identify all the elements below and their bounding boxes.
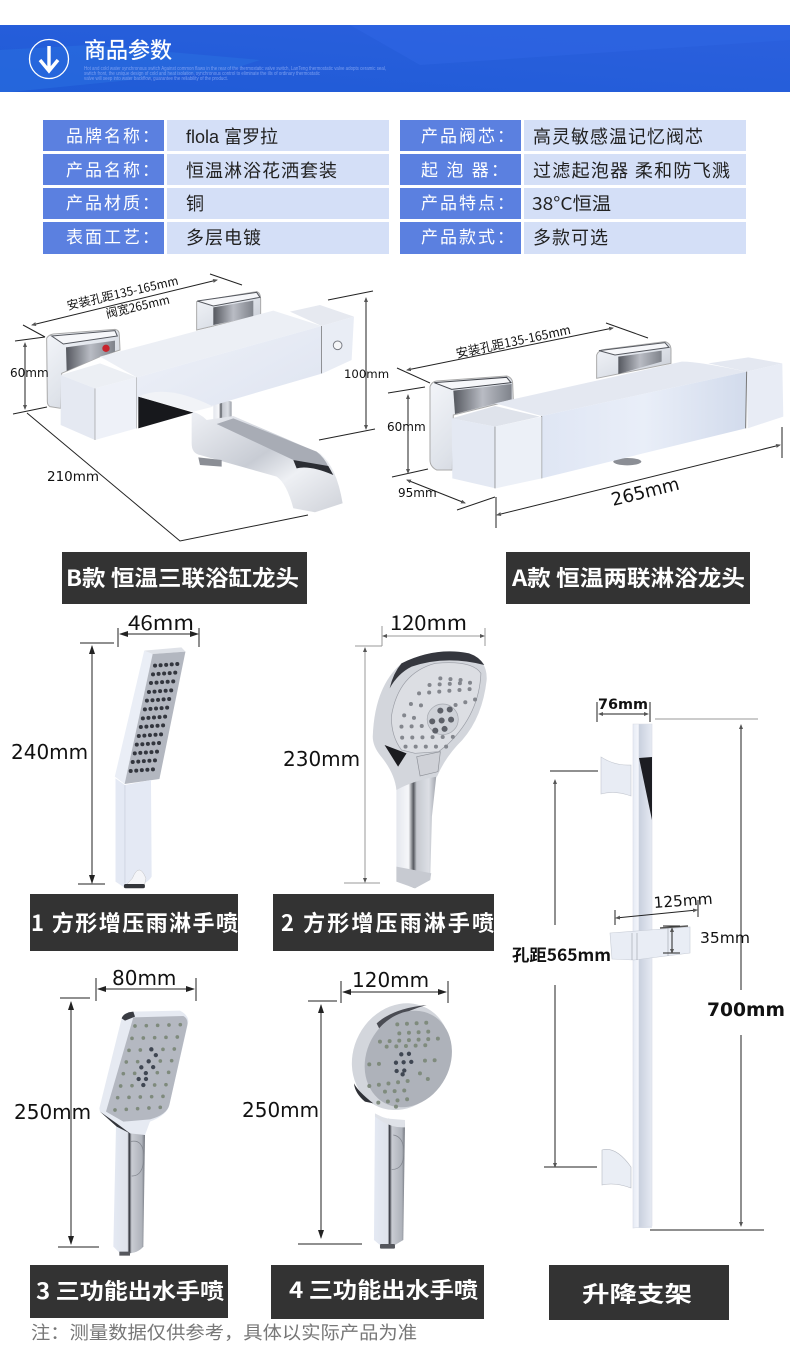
- label: sliding rail: 升降支架: [582, 1277, 692, 1309]
- dimensions: shower head 1: 46mm: [128, 607, 194, 636]
- panel: specification table left: 品牌名称：: [66, 122, 161, 147]
- dimensions: shower head 2: 230mm: [283, 747, 360, 771]
- english blurb: [84, 66, 386, 82]
- label: shower head 1: [30, 894, 238, 951]
- product: A model faucet: [430, 342, 783, 488]
- dimensions: B model faucet: 100mm: [344, 367, 389, 381]
- panel: specification table right: 过滤起泡器 柔和防飞溅: [533, 157, 730, 183]
- panel: specification table right: 多款可选: [533, 224, 609, 250]
- label: shower head 4: 4 三功能出水手喷: [289, 1273, 478, 1305]
- english blurb: switch front, the unique design of cold and heat isolation, synchronous control to eliminate the ills of ordinary thermostatic: [84, 71, 320, 77]
- panel: specification table left: 产品材质：: [66, 189, 161, 214]
- product: shower head 4: [333, 986, 469, 1249]
- panel: specification table left: 恒温淋浴花洒套装: [186, 157, 338, 183]
- label: shower head 2: [273, 894, 494, 951]
- header banner: [0, 25, 790, 92]
- dimensions: shower head 3: [14, 966, 196, 1247]
- panel: specification table left: 表面工艺：: [66, 223, 161, 248]
- dimensions: shower head 1: 240mm: [11, 740, 88, 764]
- label: B model: [62, 552, 307, 604]
- dimensions: A model faucet: [387, 319, 782, 528]
- panel: specification table right: [400, 120, 746, 254]
- upper bracket: [601, 757, 631, 796]
- panel: specification table left: flola 富罗拉: [186, 127, 278, 147]
- dimensions: shower head 4: 120mm: [352, 968, 429, 992]
- dimensions: sliding rail: 76mm: [598, 697, 648, 713]
- slider: [610, 927, 690, 960]
- label: shower head 2: 2 方形增压雨淋手喷: [281, 906, 494, 938]
- dimensions: sliding rail: 35mm: [700, 929, 750, 947]
- dimensions: B model faucet: 阀宽265mm: [104, 291, 171, 322]
- dimensions: shower head 2: 120mm: [390, 607, 467, 636]
- panel: specification table right: 高灵敏感温记忆阀芯: [533, 123, 704, 149]
- dimensions: A model faucet: 安装孔距135-165mm: [454, 319, 572, 362]
- dimensions: B model faucet: 60mm: [10, 366, 49, 380]
- product: shower head 1: [115, 647, 185, 888]
- panel: specification table left: [43, 120, 389, 254]
- panel: specification table right: 产品阀芯：: [421, 122, 516, 147]
- english blurb: valve will seep into water backflow, guarantee the reliability of the product.: [84, 76, 228, 82]
- dimensions: B model faucet: [10, 272, 389, 541]
- dimensions: shower head 3: 80mm: [112, 966, 176, 990]
- product: sliding rail: [601, 724, 690, 1228]
- dimensions: sliding rail: 孔距565mm: [512, 942, 611, 966]
- label: shower head 4: [271, 1265, 484, 1319]
- dimensions: shower head 1: [11, 607, 199, 884]
- product: B model faucet: [47, 292, 354, 512]
- panel: specification table left: 铜: [186, 190, 204, 216]
- label: shower head 3: [30, 1265, 228, 1318]
- dimensions: A model faucet: 60mm: [387, 420, 426, 434]
- icon: down arrow in circle: [30, 40, 68, 78]
- panel: specification table right: 起 泡 器：: [421, 156, 508, 181]
- dimensions: A model faucet: 95mm: [398, 486, 437, 500]
- label: shower head 3: 3 三功能出水手喷: [36, 1274, 224, 1306]
- heading: product parameters: 商品参数: [84, 33, 172, 65]
- panel: specification table left: 多层电镀: [186, 224, 262, 250]
- dimensions: shower head 4: [242, 968, 448, 1244]
- label: A model: [506, 552, 750, 604]
- dimensions: shower head 4: 250mm: [242, 1098, 319, 1122]
- panel: specification table right: 产品款式：: [421, 223, 516, 248]
- dimensions: shower head 2: [283, 607, 485, 883]
- footnote: 注：测量数据仅供参考，具体以实际产品为准: [31, 1319, 417, 1345]
- lower bracket: [602, 1149, 631, 1188]
- panel: specification table right: 产品特点：: [421, 189, 516, 214]
- dimensions: shower head 3: 250mm: [14, 1100, 91, 1124]
- panel: specification table left: 产品名称：: [66, 156, 161, 181]
- label: A model: A款 恒温两联淋浴龙头: [511, 561, 745, 593]
- dimensions: B model faucet: 210mm: [47, 469, 99, 485]
- product: shower head 2: [373, 651, 487, 888]
- dimensions: B model faucet: 安装孔距135-165mm: [65, 272, 180, 314]
- label: B model: B款 恒温三联浴缸龙头: [66, 561, 299, 593]
- dimensions: sliding rail: 125mm: [653, 890, 713, 912]
- panel: specification table right: 38°C恒温: [532, 190, 611, 216]
- product: shower head 3: [99, 1011, 188, 1256]
- dimensions: A model faucet: 265mm: [609, 474, 682, 511]
- dimensions: sliding rail: [512, 697, 785, 1230]
- english blurb: Hot and cold water synchronous switch Against common flaws in the rear of the thermostatic valve switch, LanTeng thermostatic valve adopts ceramic seal,: [84, 66, 386, 72]
- label: sliding rail: [549, 1265, 729, 1320]
- dimensions: sliding rail: 700mm: [707, 1000, 785, 1021]
- label: shower head 1: 1 方形增压雨淋手喷: [31, 906, 238, 938]
